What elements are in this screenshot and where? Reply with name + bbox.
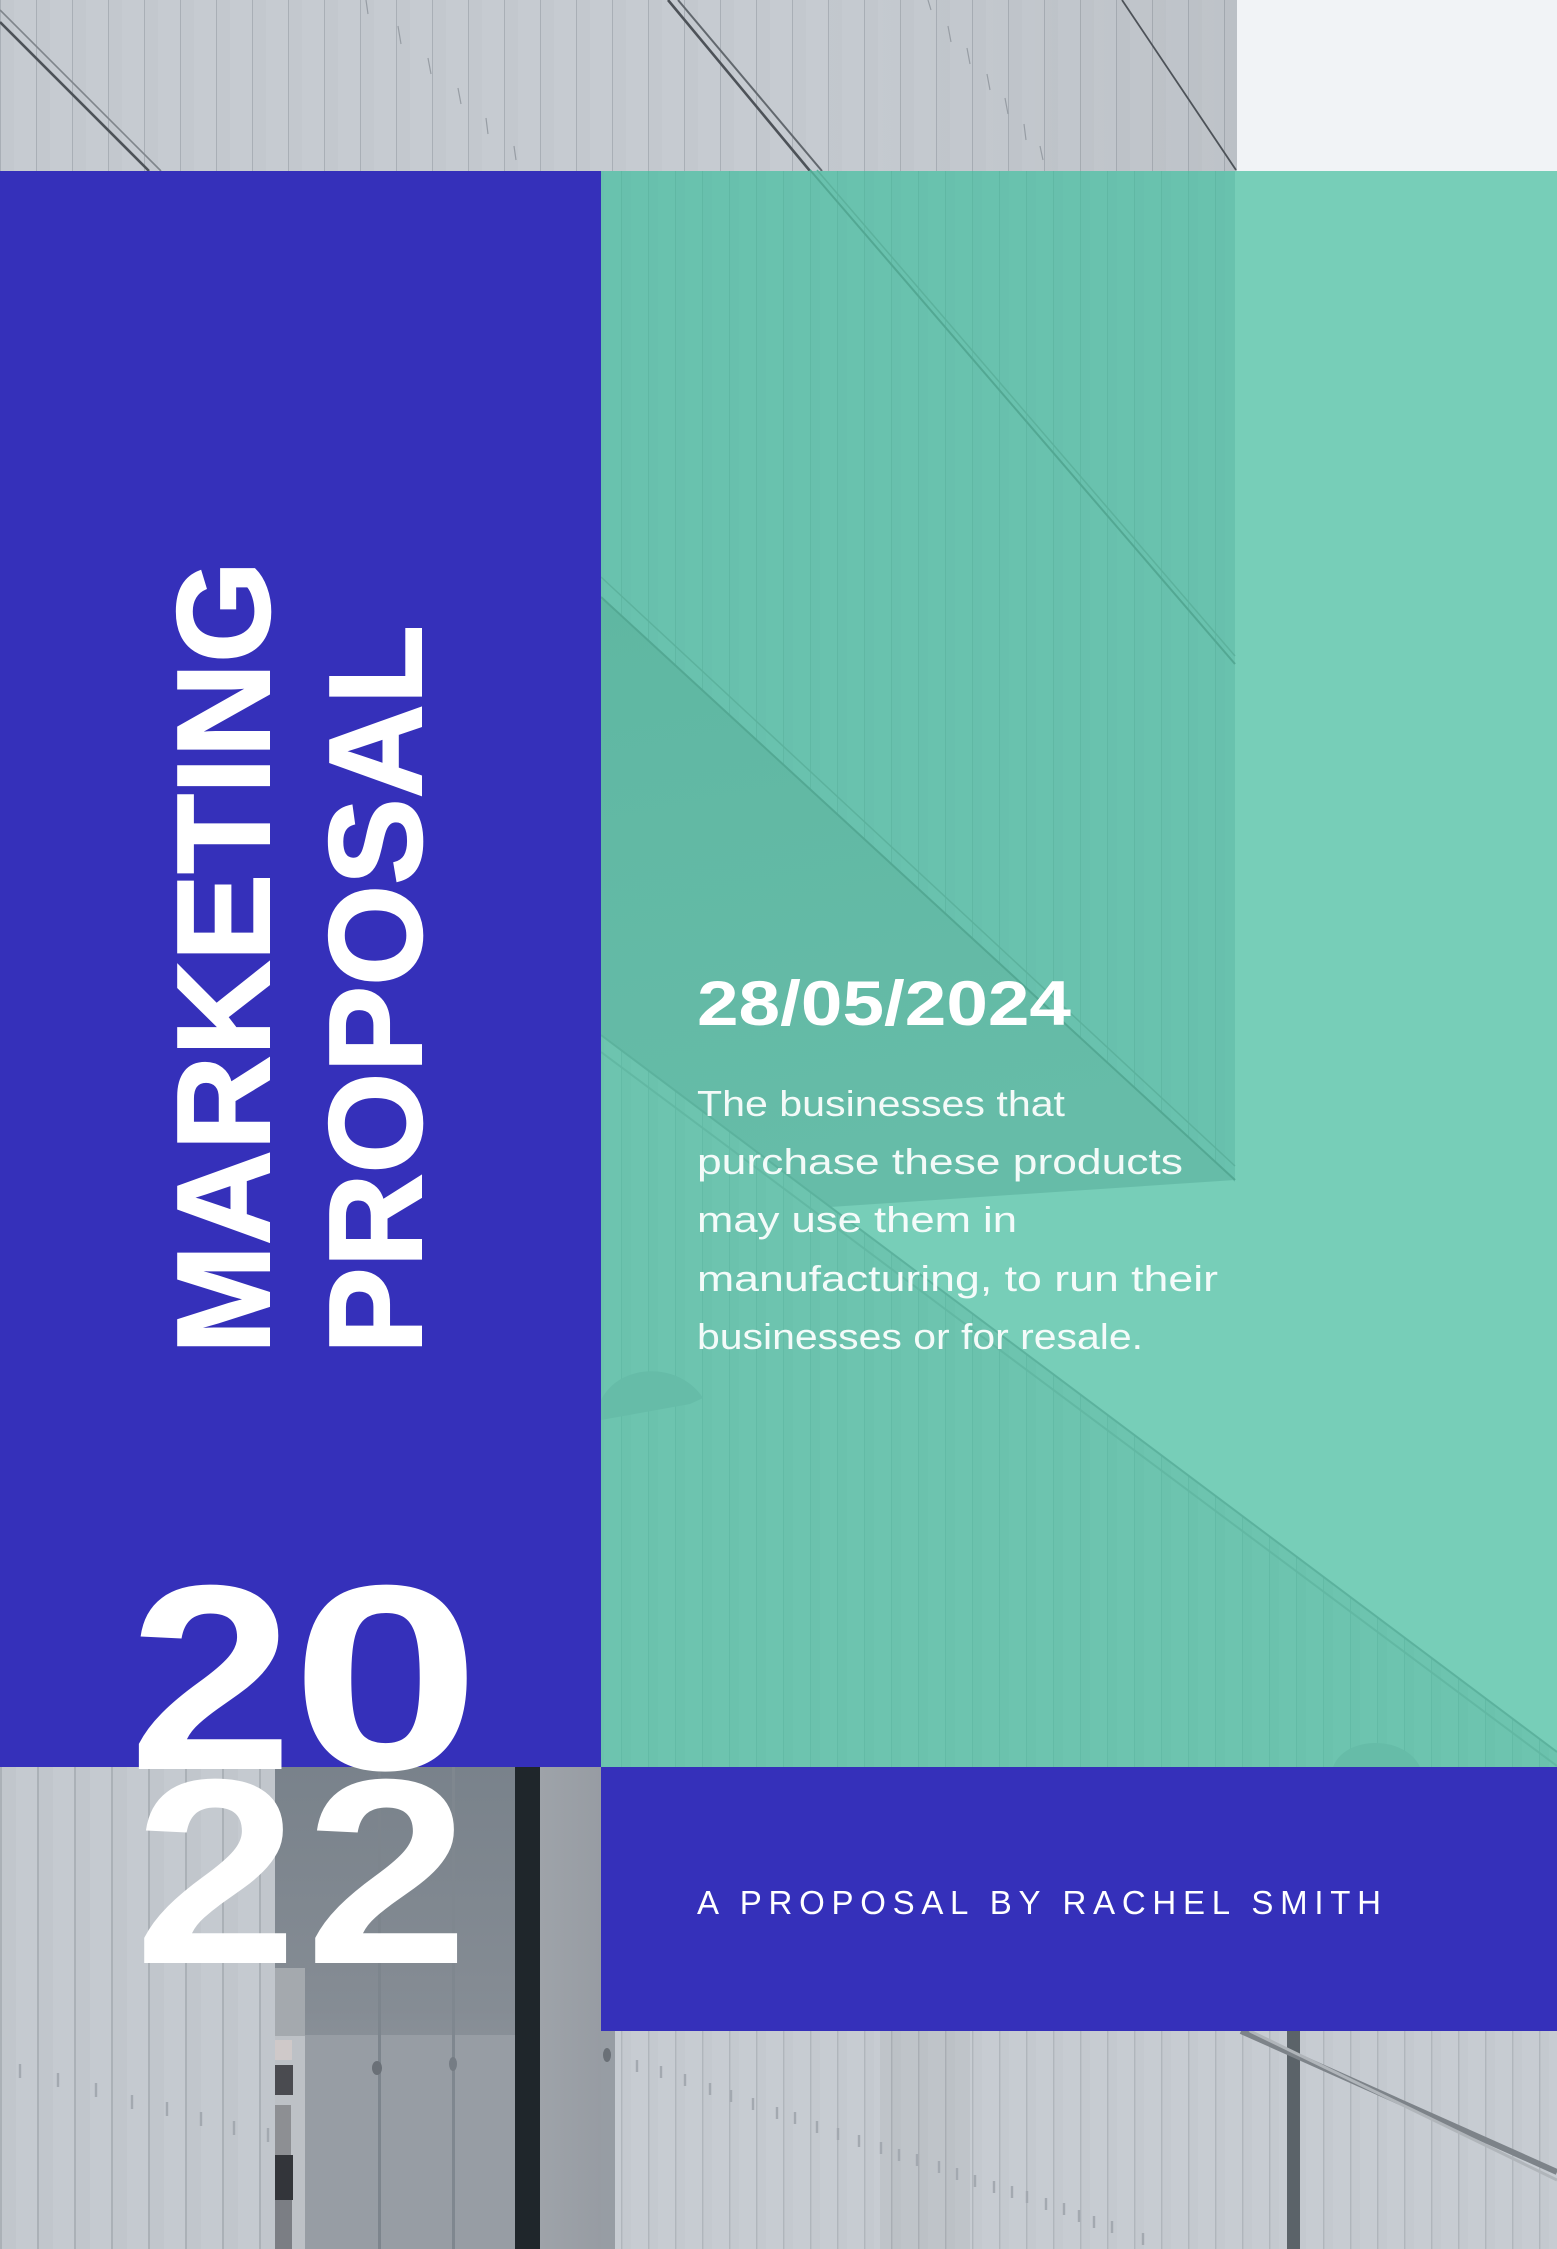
panel: teal photo overlay — [601, 170, 1557, 1767]
year: 2022 — [129, 1530, 481, 2020]
date: 28/05/2024 — [697, 969, 1071, 1039]
text block: description: businesses or for resale. — [697, 1316, 1143, 1357]
year: 2022: 0 — [291, 1530, 481, 1825]
year: 2022: 2 — [305, 1725, 469, 2020]
title: marketing proposal: PROPOSAL — [302, 625, 449, 1354]
title: marketing proposal: MARKETING — [150, 561, 297, 1354]
background photo: upper building facade — [0, 0, 1557, 171]
text block: description — [697, 1083, 1218, 1357]
panel: blue author band — [601, 1767, 1557, 2031]
title: marketing proposal — [150, 561, 449, 1354]
text block: description: The businesses that — [697, 1083, 1065, 1124]
year: 2022: 2 — [134, 1725, 298, 2020]
text block: description: may use them in — [697, 1199, 1017, 1240]
year: 2022: 2 — [129, 1531, 293, 1825]
background photo: lower building facade — [0, 1767, 1557, 2249]
author line: A PROPOSAL BY RACHEL SMITH — [697, 1884, 1381, 1921]
text block: description: manufacturing, to run their — [697, 1258, 1218, 1299]
panel: blue title column — [0, 171, 601, 1767]
text block: description: purchase these products — [697, 1141, 1183, 1182]
